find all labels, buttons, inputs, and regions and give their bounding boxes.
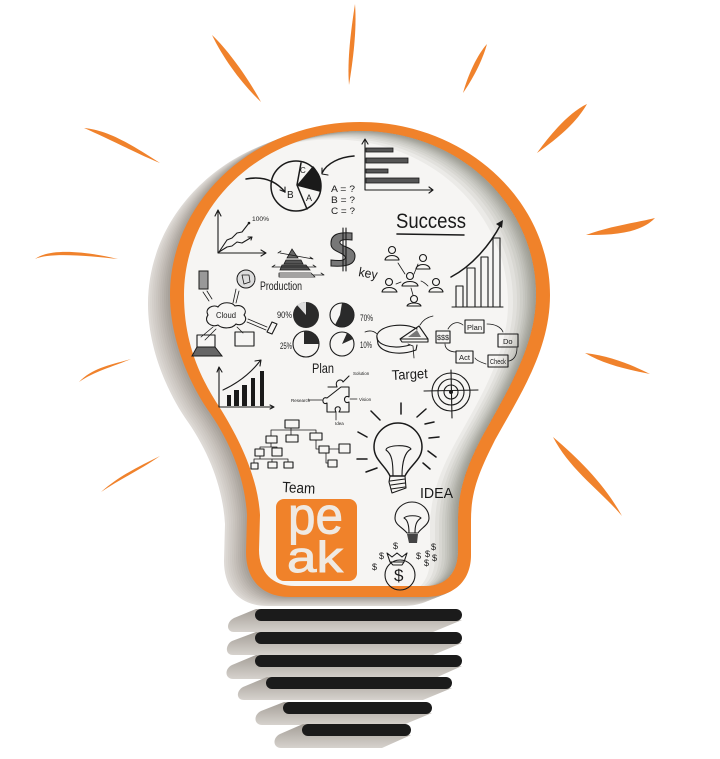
target icon	[424, 370, 478, 418]
peak logo	[276, 488, 357, 582]
pie chart with A B C: A	[306, 193, 312, 203]
money bag: $	[424, 558, 429, 568]
money bag: $	[425, 549, 430, 559]
small light bulb sketch	[395, 502, 429, 543]
line chart 100%: 100%	[252, 216, 269, 223]
percentage pie charts: 90%	[277, 310, 292, 320]
label: Production: Production	[260, 281, 302, 293]
PDCA cycle: Plan	[467, 323, 482, 332]
label: Target: Target	[391, 365, 428, 383]
pie chart with A B C	[246, 156, 354, 211]
answers list: A = ?	[331, 184, 355, 194]
rays of light	[35, 4, 655, 516]
money bag: $	[416, 551, 421, 561]
PDCA cycle: Act	[459, 353, 471, 362]
bulb base shadows	[226, 609, 462, 748]
percentage pie charts: 10%	[360, 340, 372, 351]
horizontal bar chart	[362, 139, 433, 193]
lower bar chart with arrow	[217, 360, 274, 409]
answers list	[331, 184, 355, 216]
puzzle diagram: Solution	[353, 371, 370, 376]
money bag	[372, 541, 437, 590]
big light bulb sketch	[357, 403, 439, 493]
PDCA cycle	[436, 320, 518, 367]
money bag: $	[432, 553, 437, 563]
PDCA cycle: Check	[490, 359, 506, 366]
puzzle diagram: Idea	[335, 421, 344, 426]
money bag: $	[372, 562, 377, 572]
organisation chart	[251, 420, 350, 469]
pyramid chart	[272, 249, 324, 277]
cloud network diagram	[192, 270, 277, 356]
percentage pie charts: 70%	[360, 313, 373, 324]
bulb drop shadow	[148, 123, 548, 606]
label: Plan: Plan	[312, 360, 334, 376]
puzzle diagram: Vision	[359, 397, 372, 402]
bulb inner panel	[184, 131, 536, 586]
bulb base bars	[255, 609, 462, 736]
pie chart with A B C: B	[287, 190, 294, 201]
percentage pie charts: 25%	[280, 341, 292, 351]
inner shadow	[294, 131, 536, 586]
PDCA cycle: $$$	[437, 335, 449, 342]
money bag: $	[393, 541, 398, 551]
dollar sign	[331, 228, 355, 271]
peak logo: ak	[287, 533, 344, 582]
percentage pie charts	[277, 302, 373, 357]
puzzle diagram: Research	[291, 398, 311, 403]
cloud network diagram: Cloud	[216, 311, 236, 320]
pie chart with A B C: C	[300, 166, 306, 175]
money bag: $	[379, 551, 384, 561]
line chart 100%	[215, 210, 269, 256]
peak logo: pe	[288, 488, 343, 546]
bulb orange outline	[170, 122, 550, 597]
label: key: key	[357, 264, 379, 282]
money bag: $	[394, 566, 404, 585]
growth bar chart with arrow	[451, 220, 503, 307]
money bag: $	[431, 542, 436, 552]
answers list: B = ?	[331, 195, 355, 205]
label: IDEA: IDEA	[420, 485, 453, 502]
3D pie chart	[365, 316, 433, 358]
label: Team: Team	[282, 479, 316, 498]
puzzle diagram	[291, 371, 372, 426]
answers list: C = ?	[331, 206, 355, 216]
PDCA cycle: Do	[503, 337, 513, 346]
people network	[382, 246, 443, 306]
heading: Success: Success	[396, 210, 466, 233]
